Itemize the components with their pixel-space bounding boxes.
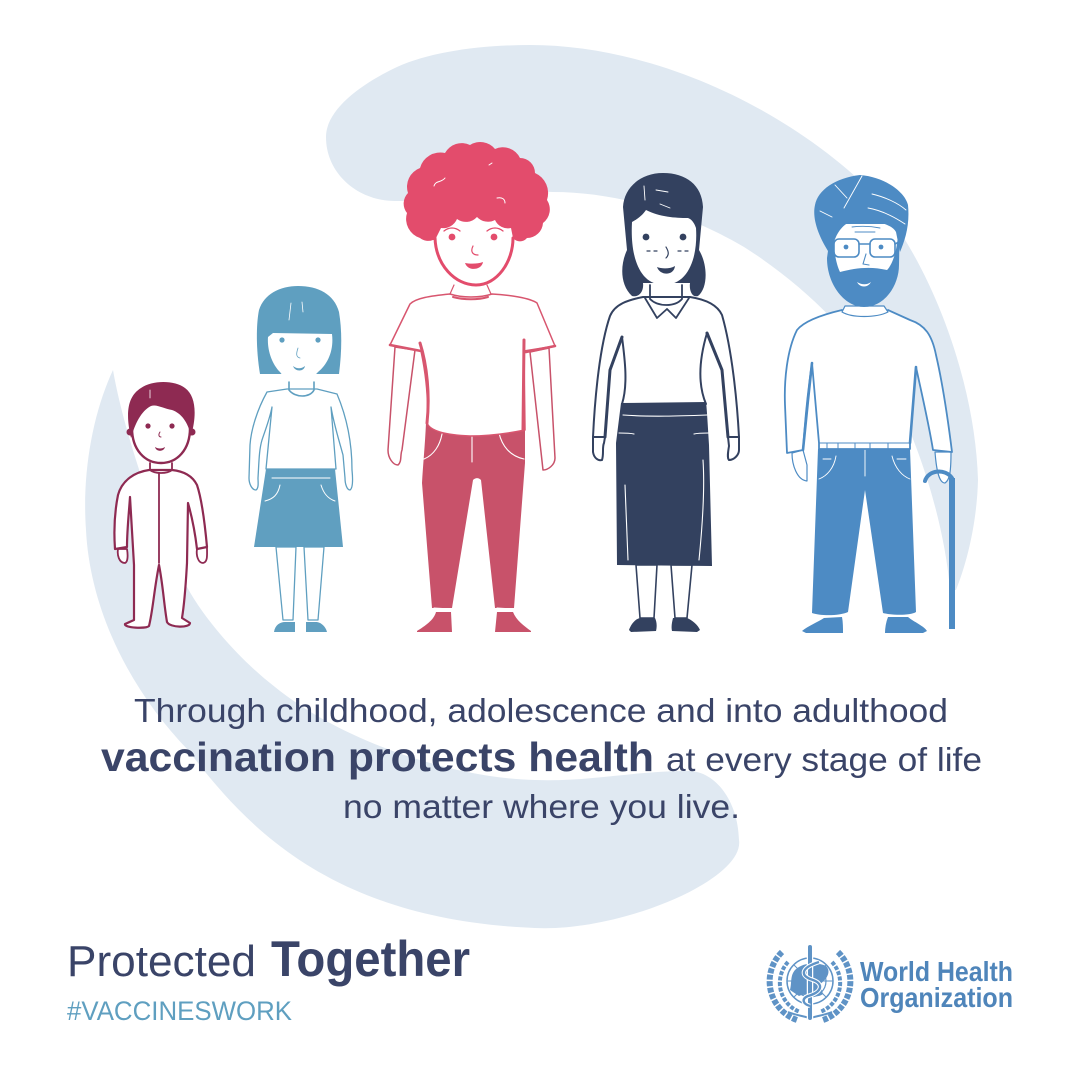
man hand and far hand xyxy=(792,450,951,483)
teen shoes xyxy=(417,612,531,632)
girl shoes xyxy=(274,622,327,632)
message line 1: Through childhood, adolescence and into adulthood xyxy=(134,692,948,729)
figure: teen with red afro xyxy=(388,142,555,632)
teen head and afro xyxy=(404,142,550,285)
message line 2 regular: at every stage of life xyxy=(666,741,982,778)
woman face xyxy=(632,186,696,285)
message line 2 bold: vaccination protects health xyxy=(101,734,654,780)
hashtag: #VACCINESWORK xyxy=(67,996,292,1026)
teen trousers xyxy=(422,423,525,608)
figure: toddler in maroon xyxy=(114,382,207,628)
title light word: Protected xyxy=(67,937,256,986)
message line 3: no matter where you live. xyxy=(343,788,740,825)
toddler body xyxy=(114,463,207,628)
girl body xyxy=(249,382,353,620)
man turban, beard and glasses xyxy=(814,175,908,307)
man shoes xyxy=(802,617,927,633)
background swirl xyxy=(85,45,978,928)
campaign title xyxy=(67,931,470,987)
man sweater xyxy=(785,306,952,453)
main message xyxy=(101,692,982,825)
WHO emblem xyxy=(770,945,850,1020)
WHO wordmark line 2: Organization xyxy=(860,982,1013,1013)
toddler head xyxy=(126,382,196,463)
teen t-shirt xyxy=(390,285,555,436)
WHO logo xyxy=(770,945,1013,1020)
figure: elderly man with turban xyxy=(785,175,955,633)
woman hair back xyxy=(622,173,706,296)
figure: woman in navy skirt xyxy=(593,173,739,632)
girl skirt xyxy=(254,469,343,547)
man trousers xyxy=(812,449,916,615)
girl hair and face xyxy=(257,286,341,381)
teen arms xyxy=(388,347,555,470)
woman legs xyxy=(636,565,692,618)
woman blouse xyxy=(593,285,739,460)
man cane xyxy=(925,472,955,629)
figure: girl in blue skirt xyxy=(249,286,353,632)
WHO wordmark line 1: World Health xyxy=(860,956,1013,987)
woman shoes xyxy=(629,618,700,632)
title bold word: Together xyxy=(271,931,470,987)
woman skirt xyxy=(616,402,712,566)
